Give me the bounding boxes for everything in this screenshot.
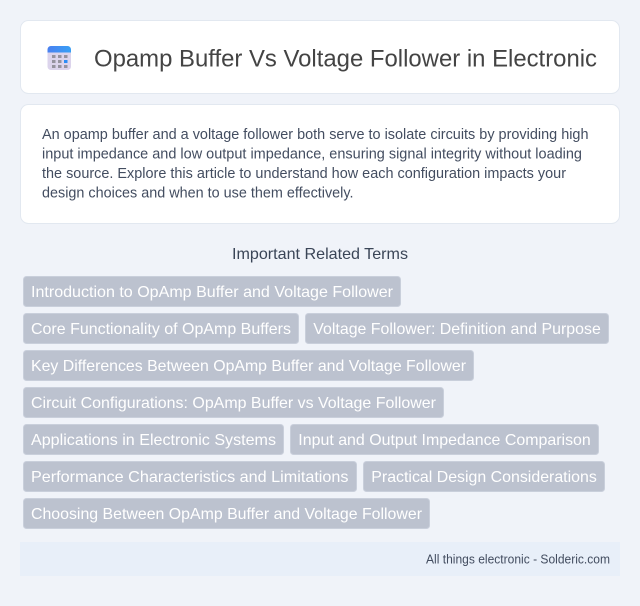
tag: core functionality [24,314,298,344]
tag: performance characteristics [24,462,356,492]
tag: voltage follower definition [306,314,608,344]
tag: core functionality: Core Functionality of OpAmp Buffers [31,321,291,338]
panel: related terms tags [24,276,608,528]
title: Opamp Buffer Vs Voltage Follower in Electronic [94,46,597,72]
footer credit: All things electronic - Solderic.com [426,552,610,566]
tag: practical design [364,462,604,492]
tag: key differences [24,350,474,380]
tag: applications [24,424,284,454]
panel: footer [20,542,620,576]
tag: applications: Applications in Electronic Systems [31,432,276,449]
panel: header [20,20,620,94]
tag: voltage follower definition: Voltage Follower: Definition and Purpose [313,321,601,338]
panel: introduction [20,104,620,224]
tag: performance characteristics: Performance Characteristics and Limitations [31,469,348,486]
heading: important related terms: Important Related Terms [232,246,408,263]
tag: choosing between: Choosing Between OpAmp Buffer and Voltage Follower [31,506,423,523]
text block: introduction paragraph: the source. Explore this article to understand how each configuration impacts your [42,166,566,182]
text block: introduction paragraph: An opamp buffer and a voltage follower both serve to isolate circuits by providing high [42,127,588,143]
text block: introduction paragraph: input impedance and low output impedance, ensuring signal integrity without loading [42,147,582,163]
icon: calendar [48,46,71,70]
text block: introduction paragraph [42,127,588,202]
tag: key differences: Key Differences Between OpAmp Buffer and Voltage Follower [31,358,467,375]
tag: circuit configurations [24,388,444,418]
tag: introduction [24,276,400,306]
tag: impedance comparison [290,424,598,454]
tag: circuit configurations: Circuit Configurations: OpAmp Buffer vs Voltage Follower [31,395,437,412]
tag: choosing between [24,498,430,528]
tag: impedance comparison: Input and Output Impedance Comparison [298,432,591,449]
tag: introduction: Introduction to OpAmp Buffer and Voltage Follower [31,284,394,301]
tag: practical design: Practical Design Considerations [371,469,597,486]
text block: introduction paragraph: design choices and when to use them effectively. [42,186,354,202]
